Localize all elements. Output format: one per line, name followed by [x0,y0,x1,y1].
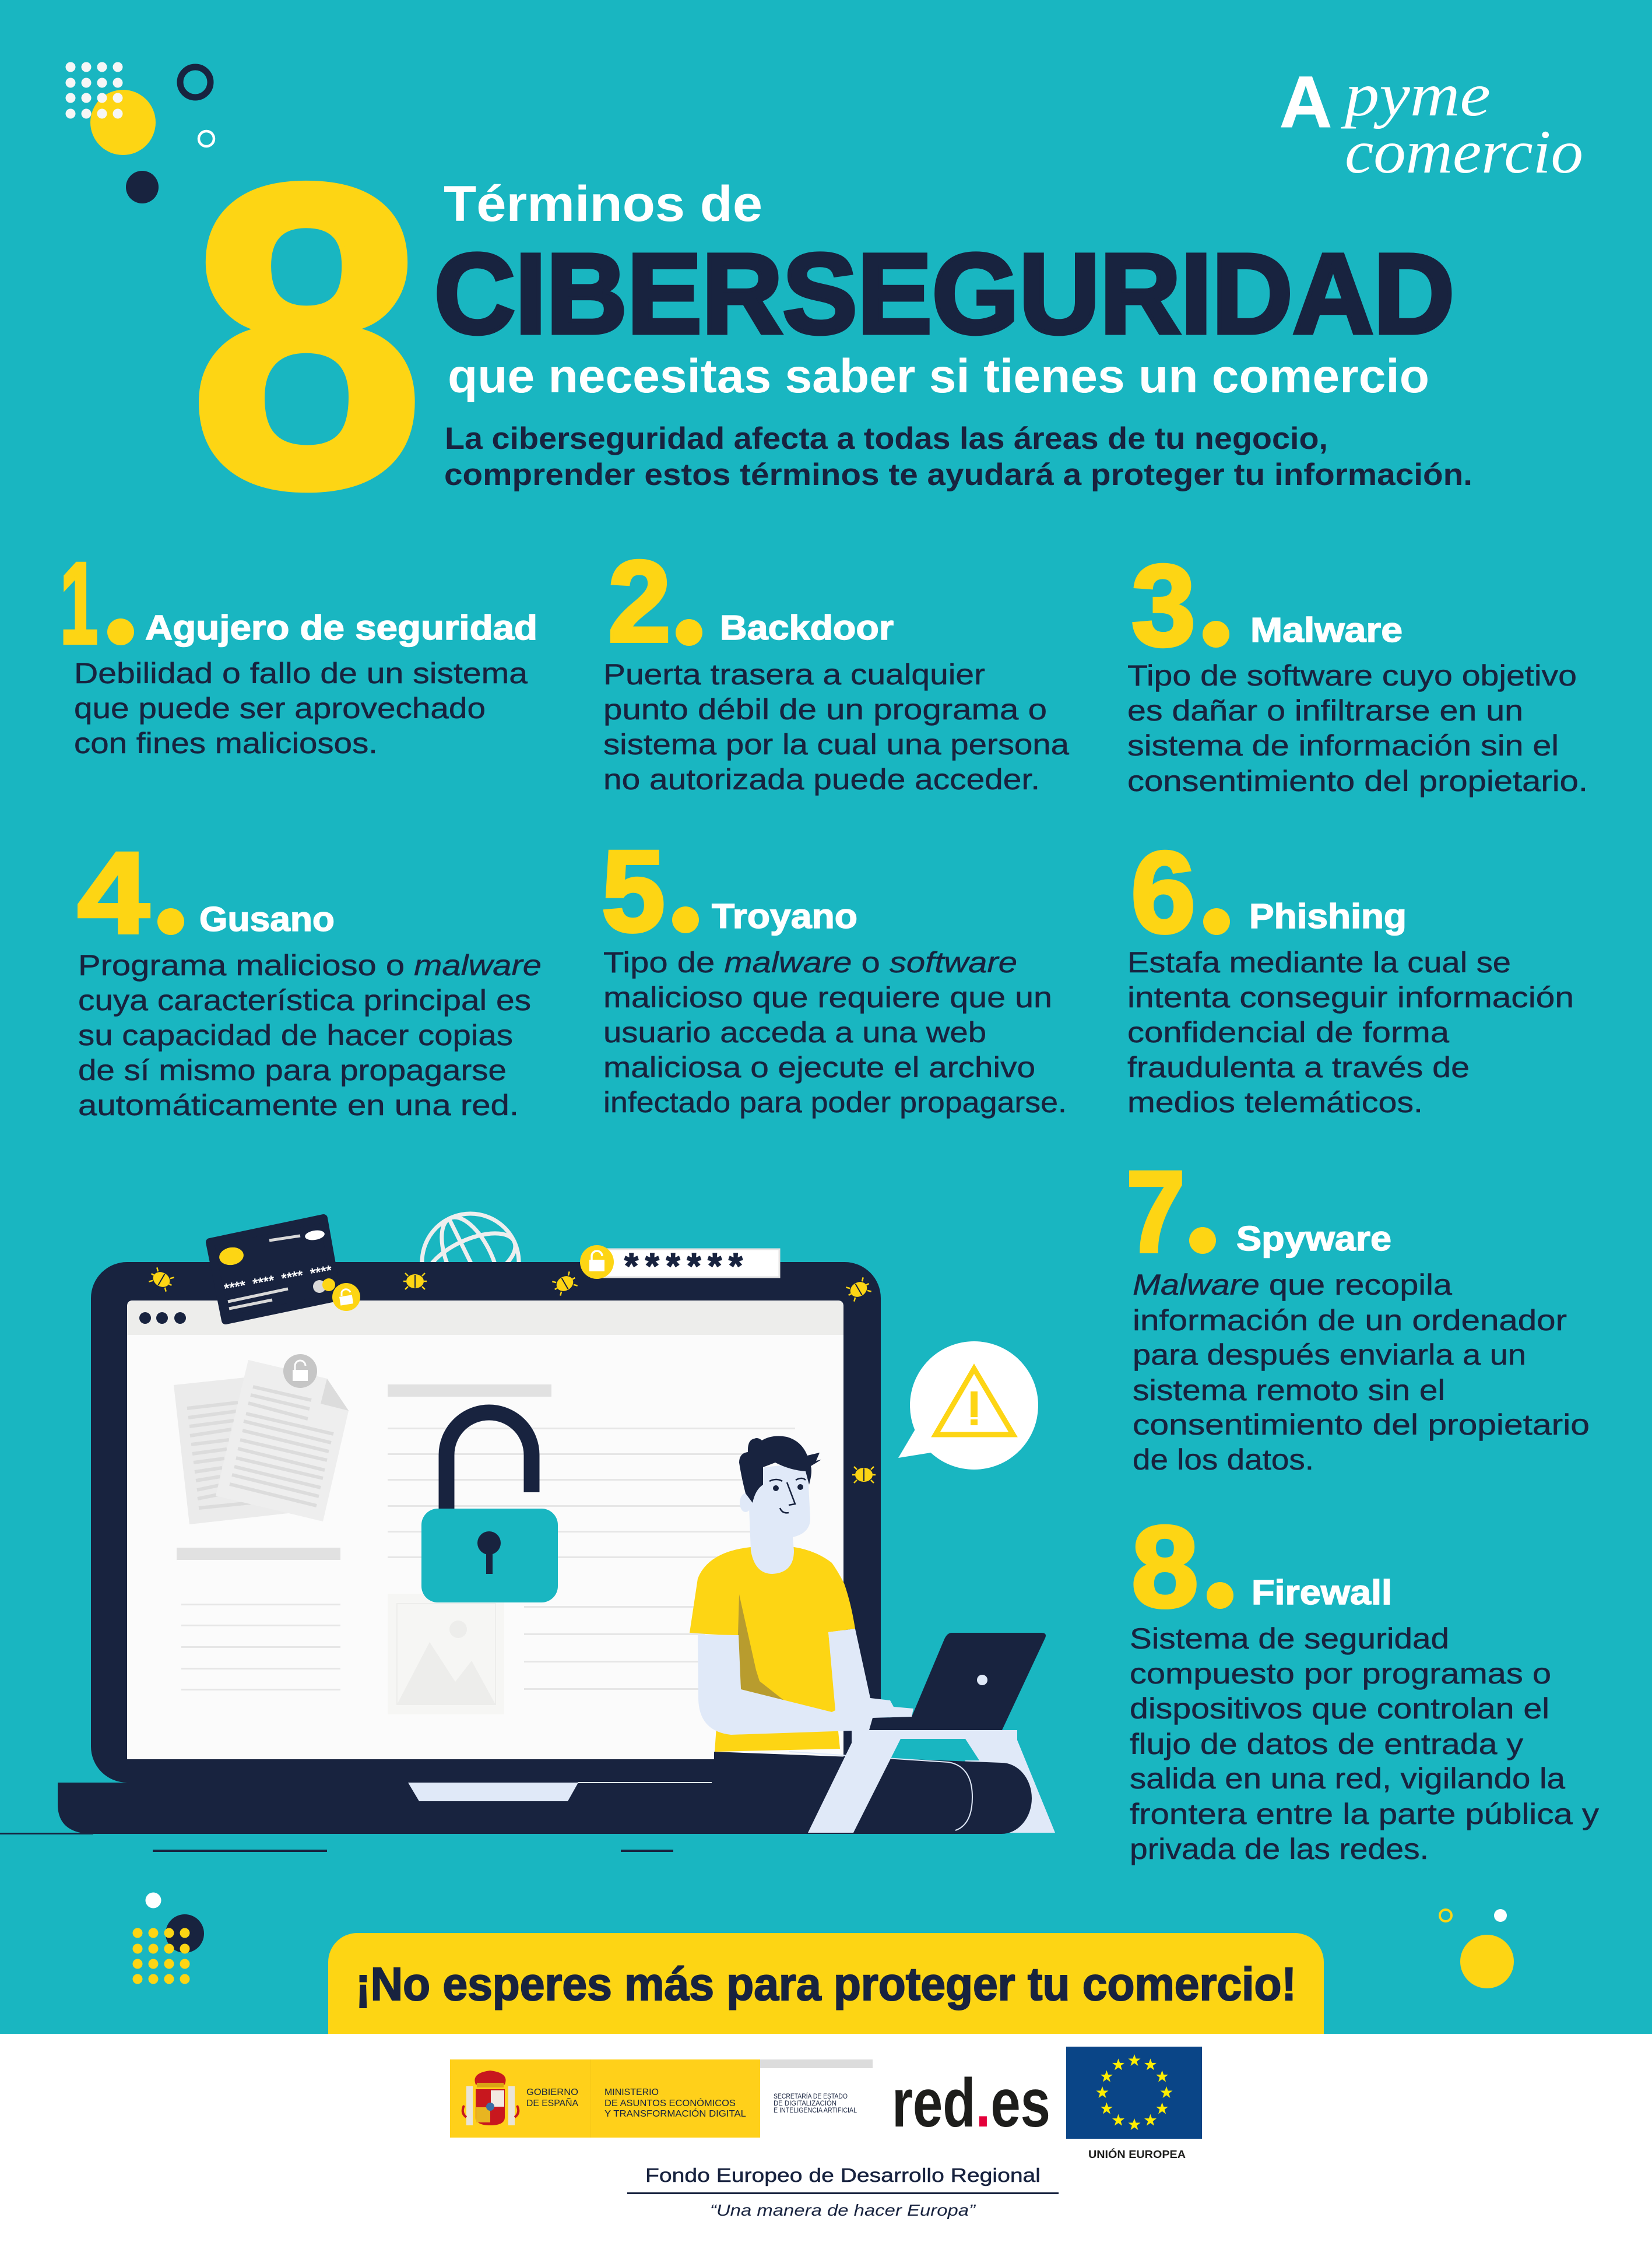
term 8: salida en una red, vigilando la [1130,1762,1565,1795]
icon: credit card [210,1218,360,1320]
term 3: Tipo de software cuyo objetivo [1127,659,1577,692]
term 5: usuario acceda a una web [603,1016,986,1049]
footer background [0,2034,1652,2246]
term 3: sistema de información sin el [1127,729,1559,762]
term 4: Programa malicioso o malware [78,949,542,982]
term 2: 2 [608,537,671,666]
browser bar [127,1300,843,1335]
term 7: 7 [1126,1147,1185,1276]
term 8: dispositivos que controlan el [1130,1692,1549,1725]
term 5: malicioso que requiere que un [603,981,1052,1014]
icon: open padlock [421,1412,558,1602]
intro text: La ciberseguridad afecta a todas las áreas de tu negocio, [445,421,1328,456]
term 5: 5 [602,827,665,955]
term 7: Spyware [1236,1219,1391,1258]
laptop lid [91,1262,881,1783]
term 3 [1127,541,1588,797]
intro text [444,421,1472,492]
term 1: que puede ser aprovechado [74,692,486,725]
term 8: frontera entre la parte pública y [1130,1798,1599,1830]
logo: Gobierno de España: MINISTERIO [604,2087,659,2097]
term 8: flujo de datos de entrada y [1130,1728,1523,1760]
logo: European Union flag [1066,2047,1202,2160]
logo: Gobierno de España: Y TRANSFORMACIÓN DIGITAL [604,2108,746,2119]
term 8 [1130,1502,1599,1865]
term 8: Sistema de seguridad [1130,1622,1449,1655]
decorative dots bottom left [133,1892,204,1984]
term 1 [60,539,537,760]
term 3: 3 [1131,541,1196,670]
term 7: información de un ordenador [1133,1304,1567,1337]
term 7: Malware que recopila [1133,1268,1452,1301]
call to action banner: ¡No esperes más para proteger tu comercio! [356,1958,1296,2010]
term 2: punto débil de un programa o [603,693,1047,726]
face [769,1478,806,1513]
arms [698,1629,913,1735]
term 8: compuesto por programas o [1130,1657,1551,1690]
illustration: laptop, person and security icons [0,1209,1055,1852]
logo: Gobierno de España: GOBIERNO [526,2087,578,2097]
logo: Gobierno de España: DE DIGITALIZACIÓN [774,2099,836,2107]
decorative dots bottom right [1440,1909,1514,1988]
title: que necesitas saber si tienes un comercio [448,350,1429,403]
term 3: es dañar o infiltrarse en un [1127,694,1523,727]
term 6: Estafa mediante la cual se [1127,946,1511,979]
laptop base and legs [58,1752,1032,1834]
documents [174,1354,349,1524]
logo: pyme comercio: pyme [1340,61,1491,129]
laptop screen [127,1300,843,1759]
fund text [627,2164,1059,2219]
person [690,1436,913,1752]
term 7: sistema remoto sin el [1133,1374,1445,1407]
term 1: 1 [60,539,98,667]
title [434,176,1454,403]
text placeholder bars [177,1384,795,1690]
term 7: para después enviarla a un [1133,1338,1526,1371]
term 4: automáticamente en una red. [78,1089,519,1122]
speech bubble with warning [898,1341,1038,1470]
term 7 [1126,1147,1590,1476]
small laptop [868,1633,1046,1730]
logo: red.es: red.es [892,2065,1050,2142]
term 1: Debilidad o fallo de un sistema [74,657,528,690]
term 2: no autorizada puede acceder. [603,763,1040,796]
term 5: infectado para poder propagarse. [603,1086,1067,1119]
term 3: Malware [1250,611,1403,649]
fund text: Fondo Europeo de Desarrollo Regional [645,2164,1041,2186]
call to action banner [328,1933,1324,2034]
term 4: Gusano [199,900,335,939]
term 6: 6 [1131,828,1196,957]
term 8: 8 [1131,1502,1198,1631]
logo: European Union flag: UNIÓN EUROPEA [1088,2148,1186,2160]
icons: bugs [147,1267,876,1483]
term 7: de los datos. [1133,1443,1314,1476]
logo: Gobierno de España [450,2059,873,2138]
term 6: confidencial de forma [1127,1016,1449,1049]
term 2: sistema por la cual una persona [603,728,1069,761]
term 6: fraudulenta a través de [1127,1051,1470,1084]
term 4 [78,828,542,1122]
shirt [690,1547,855,1752]
term 6: intenta conseguir información [1127,981,1574,1014]
term 1: Agujero de seguridad [145,609,537,647]
ground lines [0,1833,673,1852]
logo: pyme comercio: comercio [1345,118,1583,186]
head and neck [749,1463,810,1574]
icon: globe [417,1209,523,1315]
term 8: Firewall [1252,1573,1392,1612]
hair [739,1436,821,1503]
term 2: Puerta trasera a cualquier [603,658,985,691]
term 6 [1127,828,1574,1119]
shirt shadow [738,1594,784,1700]
table top and front leg [808,1730,1017,1833]
term 3: consentimiento del propietario. [1127,765,1588,797]
title: Términos de [444,176,762,232]
term 2: Backdoor [720,609,894,647]
icon: credit card: **** **** **** **** [223,1263,333,1297]
table back leg [965,1730,1055,1833]
logo: Gobierno de España: DE ASUNTOS ECONÓMICOS [604,2097,736,2108]
logo: Gobierno de España: SECRETARÍA DE ESTADO [774,2092,848,2100]
password field: ****** [624,1246,743,1287]
term 4: de sí mismo para propagarse [78,1054,507,1087]
browser dots [139,1312,186,1324]
title: CIBERSEGURIDAD [434,230,1454,357]
laptop hinge notch [408,1783,578,1801]
term 5 [602,827,1067,1119]
term 1: con fines maliciosos. [74,727,378,760]
logo: Gobierno de España: E INTELIGENCIA ARTIFICIAL [774,2106,857,2114]
term 4: su capacidad de hacer copias [78,1019,513,1052]
logo: pyme comercio [1280,61,1583,186]
ear [740,1493,751,1512]
decorative dots top left [65,62,214,203]
logo: pyme comercio: A [1280,62,1332,143]
term 7: consentimiento del propietario [1133,1408,1590,1441]
image placeholder [388,1594,504,1714]
password field [580,1245,779,1287]
logo: Gobierno de España: DE ESPAÑA [526,2097,578,2108]
term 5: Tipo de malware o software [603,946,1017,979]
term 6: medios telemáticos. [1127,1086,1423,1119]
icon: coat of arms [463,2071,518,2125]
fund text: “Una manera de hacer Europa” [710,2201,976,2219]
term 4: cuya característica principal es [78,984,531,1017]
term 5: Troyano [712,897,857,936]
teal gap under table top [892,1739,979,1760]
big number 8: 8 [188,94,425,578]
term 2 [603,537,1069,796]
term 5: maliciosa o ejecute el archivo [603,1051,1035,1084]
term 4: 4 [78,828,149,957]
term 8: privada de las redes. [1130,1833,1429,1865]
intro text: comprender estos términos te ayudará a proteger tu información. [444,458,1472,492]
term 6: Phishing [1249,897,1407,936]
thin highlight lines [578,1752,972,1830]
